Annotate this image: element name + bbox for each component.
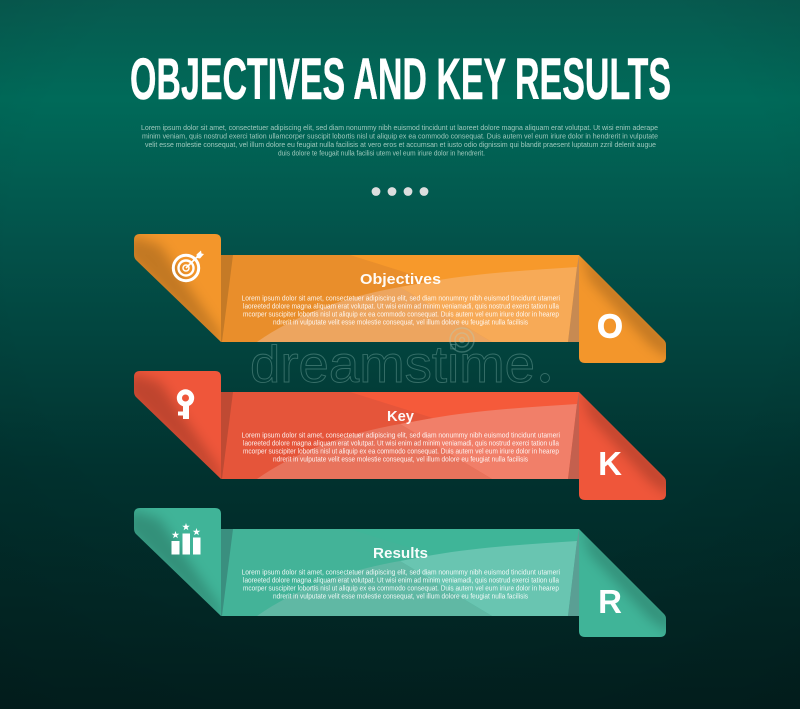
body text: ndrerit in vulputate velit esse molestie consequat, vel illum dolore eu feugiat nulla facilisis: [273, 319, 528, 326]
panel: key: [125, 371, 672, 500]
body text: mcorper suscipiter lobortis nisl ut aliquip ex ea commodo consequat. Duis autem vel eum iriure dolor in hearep: [243, 448, 559, 455]
intro text: minim veniam, quis nostrud exerci tation ullamcorper suscipit lobortis nisl ut aliquip ex ea commodo consequat. Duis autem vel eum iriure dolor in hendrerit in vulputate: [142, 132, 658, 140]
body text: Lorem ipsum dolor sit amet, consectetuer adipiscing elit, sed diam nonummy nibh euismod tincidunt utameri: [242, 295, 560, 302]
intro text: [141, 123, 658, 158]
right fold: [579, 529, 666, 637]
pagination dots: [372, 187, 428, 196]
letter R: R: [598, 583, 622, 620]
body text: [242, 295, 560, 326]
icon: target: [173, 250, 204, 281]
intro text: duis dolore te feugait nulla facilisi utem vel eum iriure dolor in hendrerit.: [278, 148, 485, 158]
body text: mcorper suscipiter lobortis nisl ut aliquip ex ea commodo consequat. Duis autem vel eum iriure dolor in hearep: [243, 311, 559, 318]
left fold: [134, 508, 221, 616]
letter O: O: [597, 308, 623, 344]
body text: Lorem ipsum dolor sit amet, consectetuer adipiscing elit, sed diam nonummy nibh euismod tincidunt utameri: [242, 432, 560, 439]
intro text: velit esse molestie consequat, vel illum dolore eu feugiat nulla facilisis at vero eros et accumsan et iusto odio dignissim qui blandit praesent luptatum zzril delenit augue: [145, 140, 656, 149]
icon: bars and stars: [172, 523, 200, 554]
body text: mcorper suscipiter lobortis nisl ut aliquip ex ea commodo consequat. Duis autem vel eum iriure dolor in hearep: [243, 585, 559, 592]
ribbon band: [221, 392, 579, 479]
letter K: K: [598, 445, 622, 482]
body text: ndrerit in vulputate velit esse molestie consequat, vel illum dolore eu feugiat nulla facilisis: [273, 593, 528, 600]
ribbon band: [221, 529, 579, 616]
heading: Objectives: [360, 271, 441, 288]
right fold: [579, 255, 666, 363]
intro text: Lorem ipsum dolor sit amet, consectetuer adipiscing elit, sed diam nonummy nibh euismod tincidunt ut laoreet dolore magna aliquam erat volutpat. Ut wisi enim aderape: [141, 123, 658, 132]
body text: laoreeted dolore magna aliquam erat volutpat. Ut wisi enim ad minim veniamadi, quis nostrud exerci tation ulla: [243, 577, 559, 584]
heading: Results: [373, 545, 428, 562]
left fold: [134, 234, 221, 342]
body text: ndrerit in vulputate velit esse molestie consequat, vel illum dolore eu feugiat nulla facilisis: [273, 456, 528, 463]
panel: results: [125, 508, 672, 637]
watermark: dreamstime: [250, 336, 535, 394]
body text: [242, 569, 560, 600]
left fold: [134, 371, 221, 479]
body text: laoreeted dolore magna aliquam erat volutpat. Ut wisi enim ad minim veniamadi, quis nostrud exerci tation ulla: [243, 303, 559, 310]
icon: key: [177, 389, 194, 419]
body text: [242, 432, 560, 463]
body text: Lorem ipsum dolor sit amet, consectetuer adipiscing elit, sed diam nonummy nibh euismod tincidunt utameri: [242, 569, 560, 576]
ribbon band: [221, 255, 579, 342]
heading: Key: [387, 408, 415, 425]
right fold: [579, 392, 666, 500]
body text: laoreeted dolore magna aliquam erat volutpat. Ut wisi enim ad minim veniamadi, quis nostrud exerci tation ulla: [243, 440, 559, 447]
panel: objectives: [125, 234, 672, 363]
